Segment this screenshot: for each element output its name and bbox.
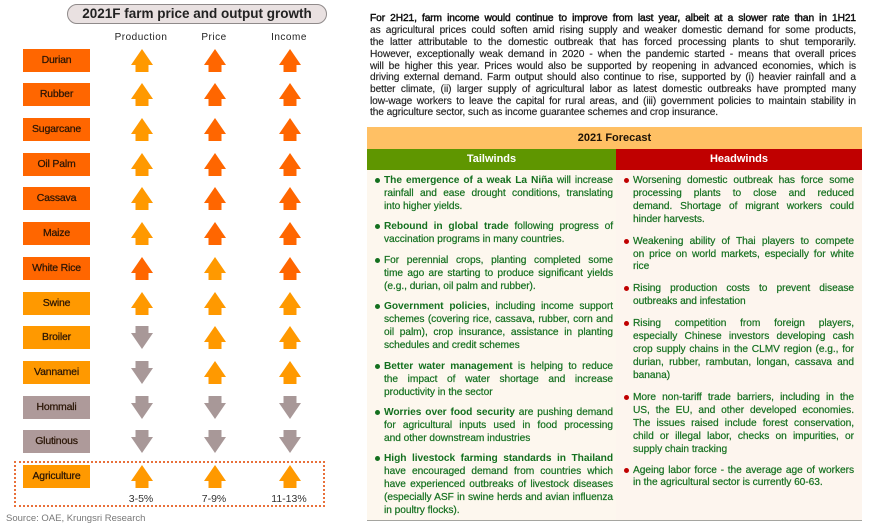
headwind: production costs: Rising production costs to prevent disease: [633, 283, 854, 294]
panel: tailwinds: [367, 170, 616, 521]
tailwind: livestock standards: have experienced outbreaks of livestock diseases: [384, 479, 613, 490]
tailwind: livestock standards: High livestock farming standards in Thailand: [384, 453, 613, 464]
headwind: foreign competition: especially Chinese investors developing cash: [633, 331, 854, 342]
headwind: trade barriers: More non-tariff trade barriers, including in the: [633, 392, 854, 403]
row: Oil Palm: [23, 153, 301, 176]
headwind: domestic outbreak: processing plants to close and reduced: [633, 188, 854, 199]
row: Sugarcane: Sugarcane: [32, 123, 81, 135]
headwind: ageing labor: in the agricultural sector is currently 60-63.: [633, 477, 823, 488]
tailwind: water management: productivity in the sector: [384, 387, 493, 398]
tailwind: livestock standards: [375, 453, 614, 516]
tailwinds heading: [367, 149, 616, 170]
row: Cassava: Cassava: [37, 192, 76, 204]
headwind: ageing labor: [624, 465, 854, 488]
forecast table heading: 2021 Forecast: [578, 132, 651, 144]
tailwind: global trade: vaccination programs in many countries.: [384, 234, 564, 245]
row: Glutinous: [23, 430, 301, 453]
callout: agriculture total dotted box: [14, 461, 325, 507]
headwind: domestic outbreak: Worsening domestic outbreak has force some: [633, 175, 854, 186]
row: Vannamei: [23, 361, 301, 384]
row: Agriculture: Agriculture: [32, 470, 80, 482]
column header: production: Production: [115, 32, 167, 43]
headwind: production costs: outbreaks and infestation: [633, 296, 746, 307]
intro text block: as agricultural prices could soften amid rising supply and weaker domestic demand for some products,: [370, 25, 856, 36]
row: Broiler: [23, 326, 301, 349]
row: Maize: Maize: [43, 227, 70, 239]
headwind: domestic outbreak: hinder harvests.: [633, 214, 705, 225]
intro text block: the agriculture sector, such as income guarantee schemes and crop insurance.: [370, 107, 718, 118]
tailwind: La Nina: [375, 175, 613, 212]
tailwind: perennial crops: For perennial crops, planting completed some: [384, 255, 613, 266]
column header: income: Income: [271, 32, 307, 43]
column header: price: Price: [201, 32, 227, 43]
tailwind: perennial crops: time ago are starting to produce significant yields: [384, 268, 613, 279]
headwind: foreign competition: crop supply chains in the CLMV region (e.g., for: [633, 344, 854, 355]
headwind: competitiveness: on price on world markets, especially for white: [633, 249, 854, 260]
row: Oil Palm: Oil Palm: [37, 158, 76, 170]
headwinds heading: Headwinds: [710, 153, 768, 165]
row: Rubber: Rubber: [40, 88, 73, 100]
tailwind: livestock standards: have encouraged demand from countries which: [384, 466, 613, 477]
intro text block: better climate, (ii) larger supply of agricultural labor as latest domestic outbreaks have prompted many: [370, 84, 856, 95]
headwind: foreign competition: durian, rubber, rambutan, longan, cassava and: [633, 357, 854, 368]
tailwind: government policies: schemes (covering rice, cassava, rubber, corn and: [384, 314, 613, 325]
row: Maize: [23, 222, 301, 245]
tailwind: La Nina: The emergence of a weak La Niña will increase: [384, 175, 613, 186]
tailwinds heading: Tailwinds: [467, 153, 516, 165]
intro text block: will be higher this year. Prices would also be supported by reopening in advanced economies, which is: [370, 60, 856, 72]
intro text block: low-wage workers to leave the capital for rural areas, and (iii) government policies to maintain stability in: [370, 96, 856, 106]
headwind: trade barriers: child or illegal labor, checks on impurities, or: [633, 431, 854, 442]
row: Durian: [23, 49, 301, 72]
tailwind: perennial crops: [375, 255, 613, 292]
tailwind: water management: [375, 361, 613, 398]
intro text block: For 2H21, farm income would continue to improve from last year, albeit at a slower rate than in 1H21: [370, 13, 856, 24]
row: Agriculture: [23, 465, 301, 488]
tailwind: food security: for agricultural inputs used in food processing: [384, 420, 613, 431]
intro text block: However, exceptionally weak demand in 2020 - when the pandemic started - means that overall prices: [370, 49, 856, 60]
row: Sugarcane: [23, 118, 301, 141]
row: Swine: [23, 292, 301, 315]
headwind: ageing labor: Ageing labor force - the average age of workers: [633, 465, 854, 476]
headwind: trade barriers: The issues raised include forest conservation,: [633, 418, 854, 429]
tailwind: La Nina: rainfall and ease drought conditions, translating: [384, 188, 613, 199]
tailwind: livestock standards: in poultry flocks).: [384, 505, 459, 516]
tailwind: livestock standards: (especially ASF in swine herds and avian influenza: [384, 492, 613, 503]
row: White Rice: White Rice: [32, 262, 81, 274]
tailwind: La Nina: into higher yields.: [384, 201, 462, 212]
income growth value: 11-13%: [271, 493, 307, 505]
tailwind: perennial crops: (e.g., durian, oil palm and rubber).: [384, 281, 536, 292]
row: Swine: Swine: [43, 296, 70, 308]
headwind: domestic outbreak: [624, 175, 854, 225]
tailwind: government policies: Government policies, including income support: [384, 301, 613, 312]
intro text block: the latter attributable to the domestic outbreak that has forced processing plants to shut temporarily.: [370, 37, 856, 48]
production growth value: 3-5%: [129, 493, 153, 505]
tailwind: food security: Worries over food security are pushing demand: [384, 407, 613, 418]
price growth value: 7-9%: [202, 493, 226, 505]
tailwind: food security: [375, 407, 613, 444]
tailwind: government policies: schedules and credit schemes: [384, 340, 520, 351]
headwind: trade barriers: US, the EU, and other developed economies.: [633, 405, 854, 416]
row: Cassava: [23, 187, 301, 210]
source note: Source: OAE, Krungsri Research: [6, 513, 145, 524]
headwind: production costs: [624, 283, 854, 307]
forecast table heading: [367, 127, 862, 149]
row: Rubber: [23, 83, 301, 106]
panel: headwinds: [616, 170, 862, 521]
headwind: competitiveness: Weakening ability of Thai players to compete: [633, 236, 854, 247]
headwind: domestic outbreak: demand. Shortage of migrant workers could: [633, 201, 854, 212]
intro text block: driving external demand. Farm output should also continue to rise, supported by (i) heavier rainfall and a: [370, 72, 856, 83]
row: Glutinous: Glutinous: [35, 435, 78, 447]
headwind: competitiveness: [624, 236, 854, 272]
tailwind: global trade: [375, 221, 614, 245]
row: Hommali: [23, 396, 301, 419]
title: [67, 4, 327, 24]
headwind: trade barriers: supply chain tracking: [633, 444, 727, 455]
headwind: foreign competition: banana): [633, 370, 670, 381]
row: Broiler: Broiler: [42, 331, 71, 343]
tailwind: global trade: Rebound in global trade following progress of: [384, 221, 613, 232]
tailwind: food security: and other downstream industries: [384, 433, 530, 444]
row: Vannamei: Vannamei: [34, 366, 79, 378]
title: 2021F farm price and output growth: [82, 6, 312, 21]
headwinds heading: [616, 149, 862, 170]
row: Durian: Durian: [42, 54, 71, 66]
row: Hommali: Hommali: [36, 401, 77, 413]
headwind: competitiveness: rice: [633, 261, 649, 272]
tailwind: water management: Better water management is helping to reduce: [384, 361, 613, 372]
headwind: foreign competition: Rising competition from foreign players,: [633, 318, 854, 329]
tailwind: government policies: [375, 301, 614, 351]
tailwind: government policies: oil palm), crop insurance, assistance in planting: [384, 327, 613, 338]
intro text block: [370, 13, 856, 118]
headwind: trade barriers: [624, 392, 854, 455]
tailwind: water management: the impact of water shortage and increase: [384, 374, 613, 385]
headwind: foreign competition: [624, 318, 854, 381]
row: White Rice: [23, 257, 301, 280]
